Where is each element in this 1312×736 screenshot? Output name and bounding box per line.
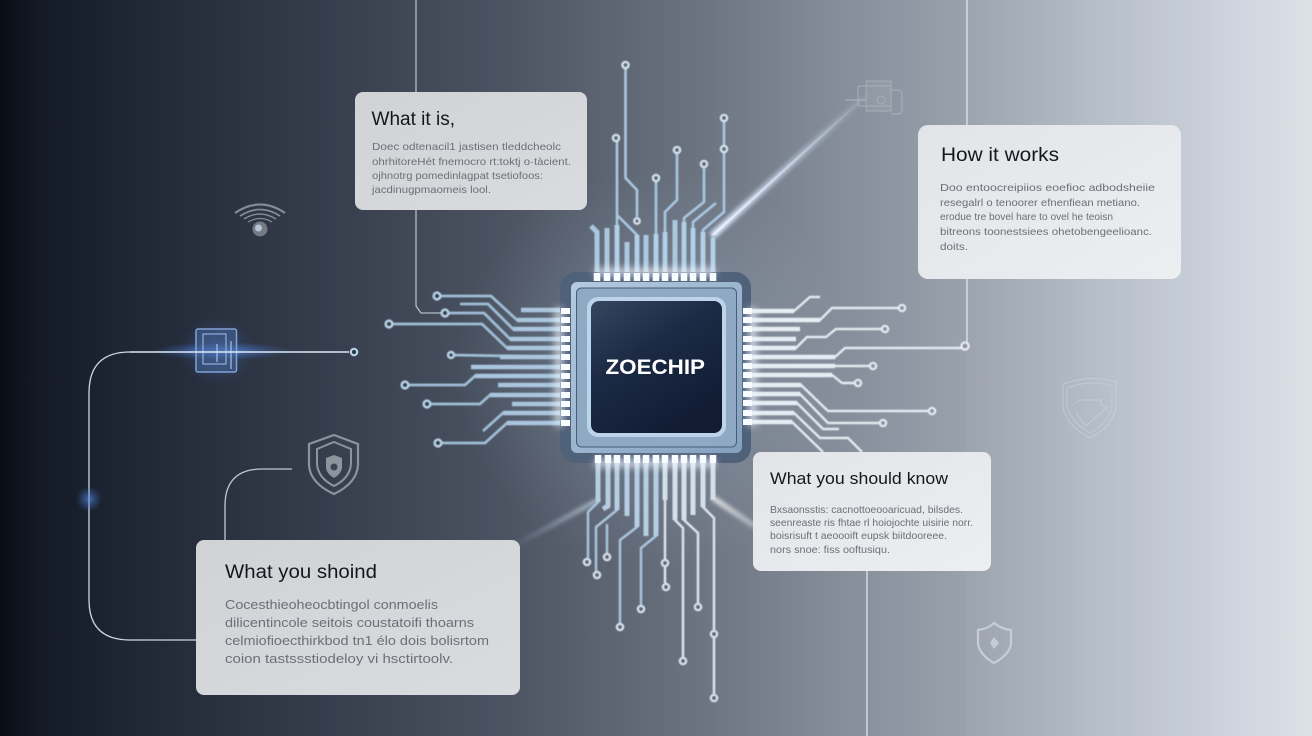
body text: bitreons toonestsiees ohetobengeelioanc.	[940, 226, 1152, 238]
body text: coion tastssstiodeloy vi hsctirtoolv.	[225, 651, 453, 666]
body text: nors snoe: fiss ooftusiqu.	[770, 544, 890, 556]
connector: shield curve to lower-left card	[225, 469, 292, 540]
body text: dilicentincole seitois coustatoifi thoarns	[225, 615, 475, 630]
heading: How it works	[941, 145, 1059, 166]
body text: celmiofioecthirkbod tn1 élo dois bolisrtom	[225, 633, 489, 648]
body text	[371, 141, 571, 196]
connector: top-left vertical line	[416, 0, 442, 313]
circuit traces: top	[591, 62, 727, 276]
chip glow	[559, 272, 752, 463]
chip label: ZOECHIP	[606, 355, 705, 379]
heading: What it is,	[372, 109, 455, 130]
light beams	[510, 92, 870, 550]
icon: ghost shield	[1063, 378, 1116, 438]
connector: top-right vertical line	[966, 0, 968, 345]
body text: erodue tre bovel hare to ovel he teoisn	[940, 211, 1113, 223]
body text: seenreaste ris fhtae rl hoiojochte uisirie norr.	[770, 517, 973, 529]
card: what you shoind	[196, 540, 520, 695]
body text: ohrhitoreHét fnemocro rt:toktj o·tàcient.	[372, 156, 571, 168]
blue glow on loop line	[76, 486, 102, 512]
heading: What you should know	[770, 469, 949, 488]
body text	[225, 597, 489, 666]
trace end nodes: top	[613, 62, 727, 224]
chip	[559, 272, 752, 463]
circuit traces: bottom	[584, 455, 717, 701]
trace end nodes: bottom	[584, 554, 717, 701]
chip outer shadow	[560, 272, 751, 463]
connector: left loop to lower-left card	[89, 352, 196, 640]
body text	[770, 504, 973, 556]
card: what it is	[355, 92, 587, 210]
body text: Doec odtenacil1 jastisen tleddcheolc	[372, 141, 561, 153]
body text: jacdinugpmaomeis lool.	[371, 184, 491, 196]
trace end nodes: left	[386, 293, 454, 446]
trace end nodes: right	[855, 305, 969, 426]
icon: glowing switch	[152, 317, 292, 385]
connector node: switch line	[130, 349, 357, 355]
connector: lower-right vertical line	[866, 571, 868, 736]
card: what you should know	[753, 452, 991, 571]
body text: Cocesthieoheocbtingol conmoelis	[225, 597, 439, 612]
icon: ghost device	[845, 81, 902, 114]
body text: ojhnotrg pomedinlagpat tsetiofoos:	[372, 170, 543, 182]
circuit traces: right	[745, 297, 969, 452]
body text: Bxsaonsstis: cacnottoeooaricuad, bilsdes.	[770, 504, 963, 516]
heading: What you shoind	[225, 562, 377, 583]
icon: wifi	[235, 204, 285, 236]
body text	[940, 182, 1155, 253]
chip package	[571, 282, 742, 453]
body text: Doo entoocreipiios eoefioc adbodsheiie	[940, 182, 1155, 194]
body text: resegalrl o tenoorer efnenfiean metiano.	[940, 197, 1140, 209]
body text: boisrisuft t aeoooift eupsk biitdooreee.	[770, 530, 947, 542]
icon: small shield	[978, 623, 1011, 663]
circuit traces: left	[386, 293, 570, 446]
bright pins	[561, 273, 752, 463]
body text: doits.	[940, 241, 968, 253]
icon: shield	[309, 435, 358, 494]
chip die	[587, 297, 726, 437]
card: how it works	[918, 125, 1181, 279]
